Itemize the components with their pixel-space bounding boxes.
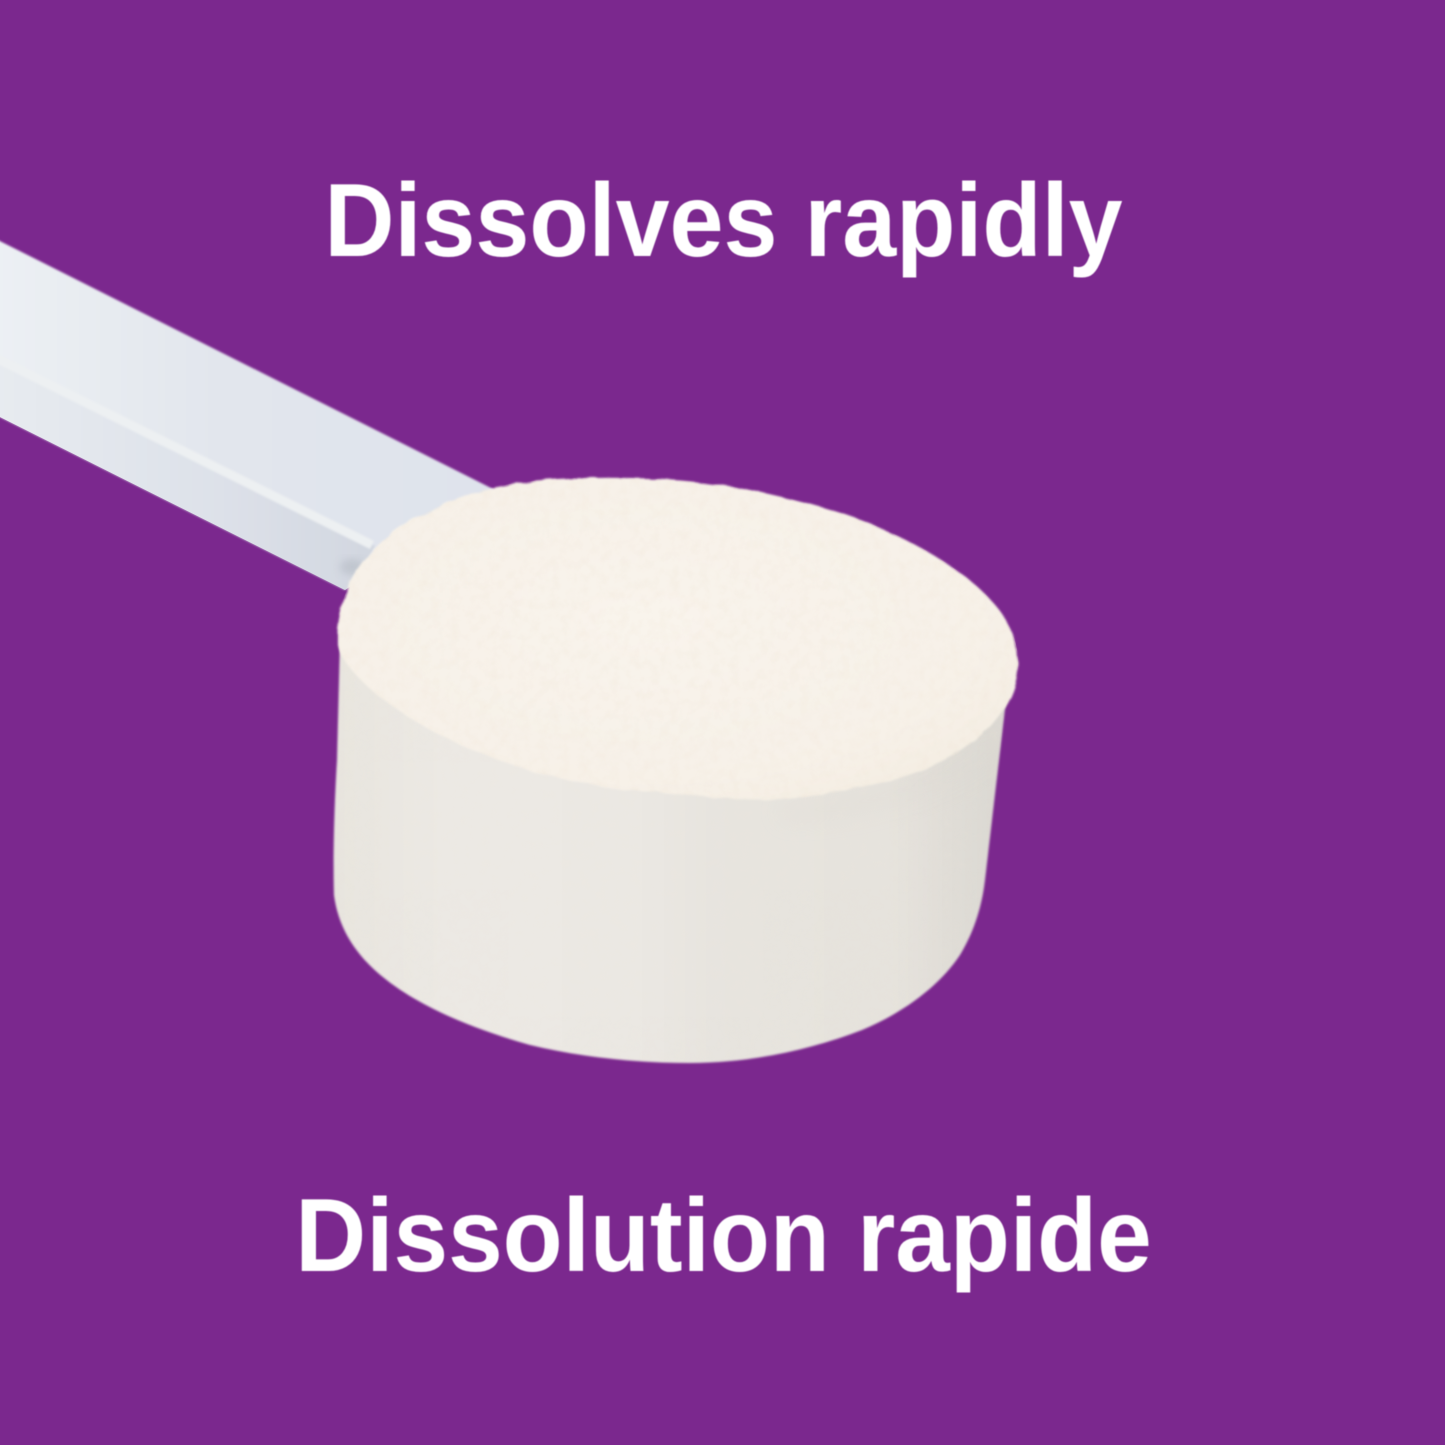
scoop handle bbox=[0, 226, 495, 600]
powder surface bbox=[338, 478, 1018, 799]
scoop cup bbox=[330, 640, 1010, 1070]
heading: french: Dissolution rapide bbox=[295, 1178, 1152, 1294]
icon: scoop of powder bbox=[0, 239, 1020, 1065]
heading: english: Dissolves rapidly bbox=[324, 163, 1123, 279]
